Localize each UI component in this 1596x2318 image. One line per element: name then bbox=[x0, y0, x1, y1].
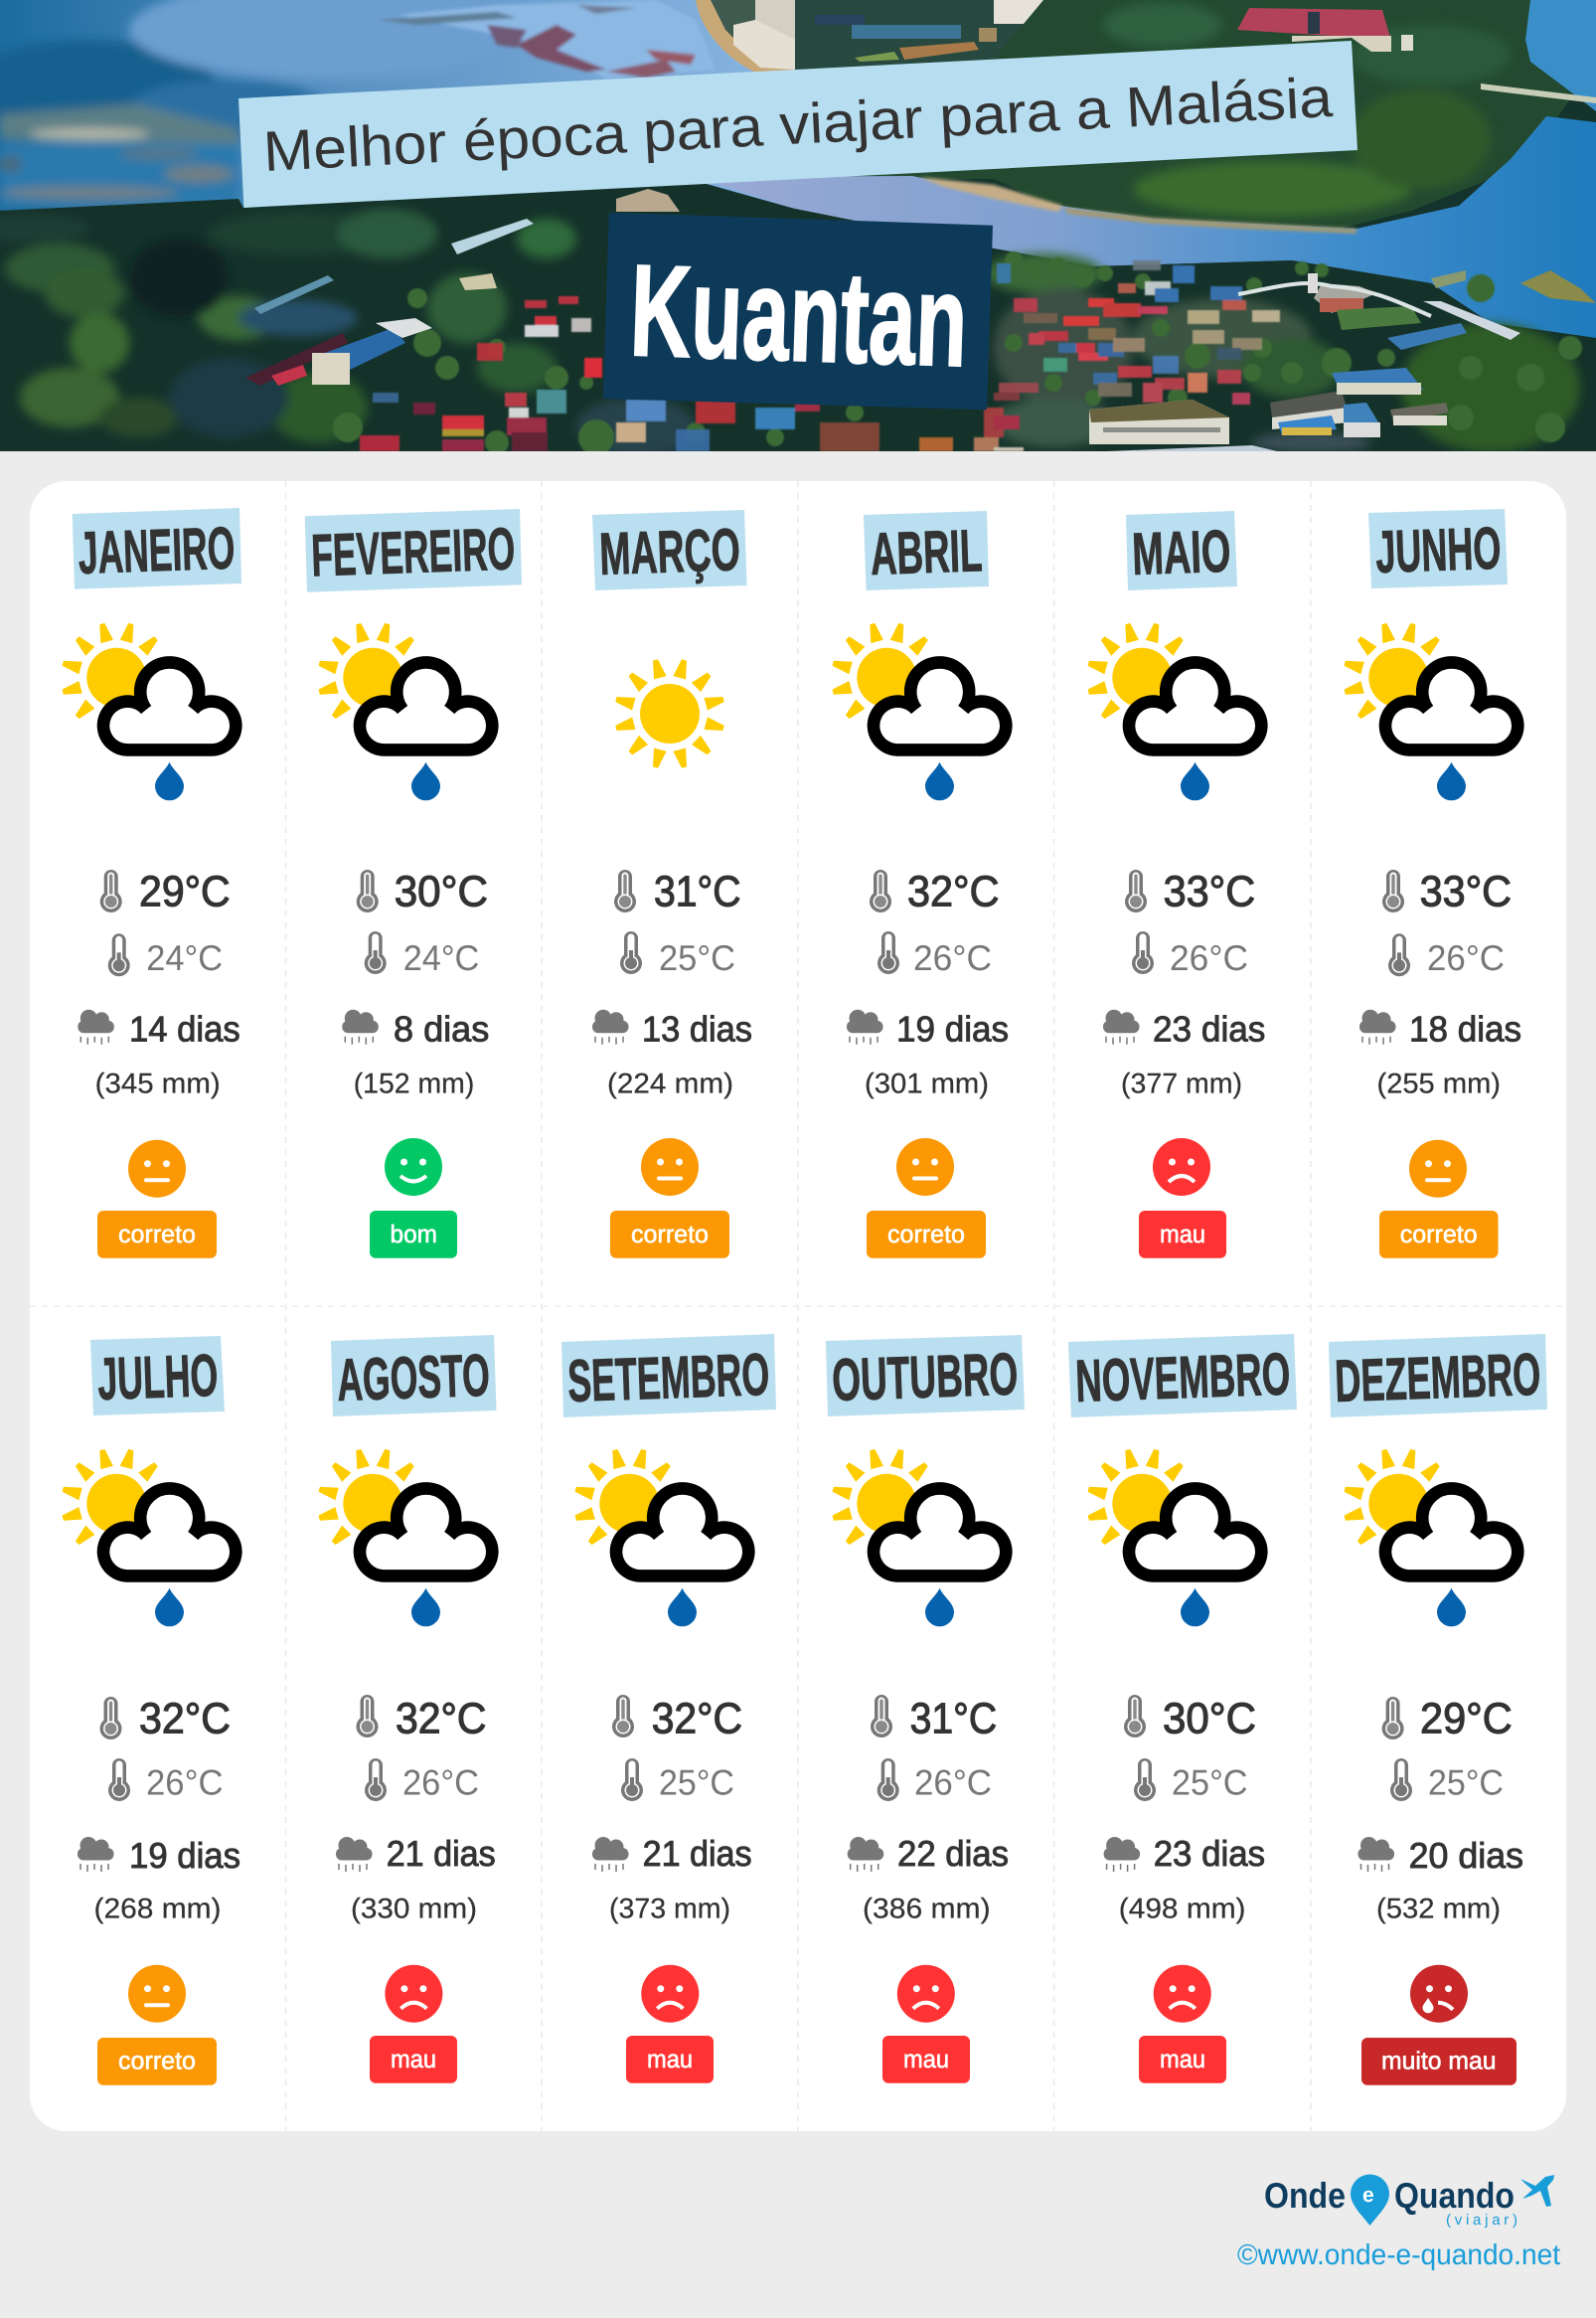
min temperature: 26°C bbox=[914, 1762, 992, 1803]
rain days bbox=[847, 1009, 1009, 1050]
panel: fevereiro bbox=[305, 509, 522, 1258]
max temperature bbox=[614, 869, 741, 916]
rating badge bbox=[370, 2036, 457, 2083]
logo: Onde e Quando viajar: Onde bbox=[1264, 2175, 1346, 2216]
rating badge bbox=[867, 1211, 986, 1258]
month label: MAIO bbox=[1131, 518, 1231, 587]
rain days bbox=[592, 1009, 752, 1050]
header photo: aerial view of Kuantan bbox=[0, 0, 1596, 457]
icon: map pin bbox=[1351, 2175, 1389, 2226]
month label bbox=[561, 1334, 776, 1417]
rating face bbox=[1409, 1140, 1467, 1198]
icon: sun and rain cloud bbox=[62, 622, 236, 800]
rainfall: (377 mm) bbox=[1121, 1068, 1242, 1099]
rain days bbox=[1359, 1009, 1521, 1050]
panel: julho bbox=[62, 1336, 240, 2085]
rain days bbox=[342, 1009, 489, 1050]
icon: sun and rain cloud bbox=[1344, 622, 1517, 800]
min temperature bbox=[620, 931, 735, 978]
month label: SETEMBRO bbox=[566, 1341, 770, 1414]
month label: OUTUBRO bbox=[831, 1341, 1019, 1413]
rating badge bbox=[97, 1211, 217, 1258]
min temperature: 25°C bbox=[659, 937, 735, 978]
max temperature: 32°C bbox=[907, 869, 1000, 916]
rainfall: (268 mm) bbox=[93, 1893, 221, 1924]
rating badge bbox=[1139, 2036, 1226, 2083]
panel: dezembro bbox=[1329, 1334, 1547, 2085]
min temperature bbox=[365, 931, 479, 978]
rainfall: (301 mm) bbox=[865, 1068, 989, 1099]
rainfall: (255 mm) bbox=[1377, 1068, 1501, 1099]
max temperature: 29°C bbox=[139, 869, 231, 916]
rating face bbox=[1153, 1138, 1210, 1196]
min temperature bbox=[1132, 931, 1248, 978]
icon: sun and rain cloud bbox=[1087, 622, 1261, 800]
max temperature bbox=[100, 869, 231, 916]
panel: março bbox=[592, 510, 752, 1258]
min temperature bbox=[1388, 933, 1505, 978]
month label bbox=[1126, 511, 1237, 590]
min temperature bbox=[878, 1758, 992, 1803]
rain days bbox=[592, 1833, 752, 1874]
icon: sun bbox=[614, 658, 725, 769]
month label bbox=[1068, 1334, 1297, 1417]
calendar card bbox=[30, 481, 1566, 2131]
rainfall: (224 mm) bbox=[607, 1068, 733, 1099]
rain days: 22 dias bbox=[897, 1833, 1009, 1874]
month label bbox=[305, 509, 522, 592]
icon: sun and rain cloud bbox=[1344, 1448, 1517, 1626]
icon: airplane bbox=[1520, 2175, 1554, 2207]
month label bbox=[1368, 509, 1508, 588]
icon: sun and rain cloud bbox=[832, 622, 1006, 800]
city name box: Kuantan bbox=[628, 237, 970, 394]
rating badge: muito mau bbox=[1381, 2048, 1497, 2075]
icon: sun and rain cloud bbox=[62, 1448, 236, 1626]
logo: Onde e Quando viajar bbox=[1264, 2175, 1554, 2229]
max temperature: 32°C bbox=[139, 1695, 231, 1742]
rating face bbox=[641, 1965, 699, 2023]
month label: AGOSTO bbox=[336, 1342, 491, 1413]
rating badge: mau bbox=[1160, 1221, 1205, 1248]
max temperature bbox=[1124, 1695, 1256, 1742]
month label: FEVEREIRO bbox=[310, 515, 516, 588]
min temperature: 24°C bbox=[403, 937, 479, 978]
max temperature bbox=[870, 869, 1000, 916]
rain days: 13 dias bbox=[642, 1009, 752, 1050]
min temperature: 25°C bbox=[1428, 1762, 1504, 1803]
rain days: 20 dias bbox=[1409, 1835, 1523, 1876]
rain days bbox=[78, 1009, 240, 1050]
rain days: 23 dias bbox=[1154, 1833, 1265, 1874]
rain days bbox=[848, 1833, 1009, 1874]
title band bbox=[239, 41, 1357, 208]
min temperature: 24°C bbox=[146, 937, 223, 978]
rain days bbox=[1103, 1009, 1265, 1050]
max temperature bbox=[1382, 1695, 1513, 1742]
min temperature: 25°C bbox=[659, 1762, 734, 1803]
rain days bbox=[1104, 1833, 1265, 1874]
min temperature bbox=[108, 1758, 223, 1803]
rating face bbox=[128, 1965, 186, 2023]
max temperature: 32°C bbox=[396, 1695, 487, 1742]
panel: abril bbox=[832, 511, 1009, 1258]
rating badge: correto bbox=[118, 2048, 196, 2075]
rating face bbox=[385, 1965, 442, 2023]
icon: sun and rain cloud bbox=[318, 622, 492, 800]
panel: junho bbox=[1344, 509, 1521, 1258]
min temperature bbox=[1134, 1758, 1248, 1803]
panel: setembro bbox=[561, 1334, 776, 2083]
min temperature bbox=[621, 1758, 734, 1803]
max temperature bbox=[99, 1695, 231, 1742]
rating face bbox=[128, 1140, 186, 1198]
rating face bbox=[897, 1965, 955, 2023]
rating badge bbox=[1139, 1211, 1226, 1258]
rain days: 19 dias bbox=[129, 1835, 240, 1876]
rain days: 18 dias bbox=[1409, 1009, 1521, 1050]
min temperature bbox=[108, 933, 223, 978]
rating face bbox=[1410, 1965, 1468, 2023]
max temperature bbox=[871, 1695, 997, 1742]
logo: Onde e Quando viajar: Quando bbox=[1394, 2175, 1515, 2216]
panel: maio bbox=[1087, 511, 1265, 1258]
city name box bbox=[603, 213, 993, 410]
rating face bbox=[385, 1138, 442, 1196]
min temperature: 26°C bbox=[913, 937, 992, 978]
rainfall: (373 mm) bbox=[609, 1893, 730, 1924]
max temperature bbox=[357, 869, 488, 916]
icon: sun and rain cloud bbox=[832, 1448, 1006, 1626]
rating badge: mau bbox=[647, 2046, 693, 2073]
rating badge bbox=[626, 2036, 714, 2083]
rating badge bbox=[1361, 2038, 1516, 2085]
max temperature: 30°C bbox=[1163, 1695, 1256, 1742]
month label bbox=[73, 508, 241, 589]
month label: MARÇO bbox=[598, 516, 741, 587]
rating badge: bom bbox=[390, 1221, 437, 1248]
min temperature bbox=[365, 1758, 479, 1803]
max temperature bbox=[612, 1695, 742, 1742]
rain days: 23 dias bbox=[1153, 1009, 1265, 1050]
month label: JANEIRO bbox=[78, 515, 236, 586]
rating badge bbox=[370, 1211, 457, 1258]
max temperature: 31°C bbox=[910, 1695, 997, 1742]
max temperature bbox=[1125, 869, 1255, 916]
max temperature: 33°C bbox=[1164, 869, 1255, 916]
rainfall: (386 mm) bbox=[863, 1893, 991, 1924]
min temperature bbox=[878, 931, 992, 978]
min temperature bbox=[1390, 1758, 1504, 1803]
rain days bbox=[1357, 1835, 1523, 1876]
rating badge bbox=[1379, 1211, 1499, 1258]
min temperature: 26°C bbox=[146, 1762, 223, 1803]
rating face bbox=[1154, 1965, 1211, 2023]
month label bbox=[90, 1336, 225, 1415]
rain days bbox=[336, 1833, 496, 1874]
rating badge bbox=[97, 2038, 217, 2085]
rating badge: correto bbox=[631, 1221, 709, 1248]
max temperature: 29°C bbox=[1420, 1695, 1513, 1742]
website credit: ©www.onde-e-quando.net bbox=[1237, 2239, 1560, 2271]
month label: JULHO bbox=[96, 1342, 219, 1412]
rating badge bbox=[882, 2036, 970, 2083]
rainfall: (498 mm) bbox=[1119, 1893, 1246, 1924]
month label bbox=[864, 511, 989, 590]
title band: Melhor época para viajar para a Malásia bbox=[261, 66, 1335, 184]
icon: sun and rain cloud bbox=[318, 1448, 492, 1626]
month label: NOVEMBRO bbox=[1074, 1340, 1291, 1414]
rating face bbox=[896, 1138, 954, 1196]
rating badge: correto bbox=[1400, 1221, 1478, 1248]
min temperature: 26°C bbox=[402, 1762, 479, 1803]
max temperature: 31°C bbox=[654, 869, 741, 916]
rainfall: (532 mm) bbox=[1376, 1893, 1501, 1924]
icon: sun and rain cloud bbox=[1087, 1448, 1261, 1626]
rain days: 19 dias bbox=[896, 1009, 1009, 1050]
rainfall: (345 mm) bbox=[95, 1068, 221, 1099]
month label bbox=[826, 1335, 1025, 1416]
logo: Onde e Quando viajar: (viajar) bbox=[1446, 2212, 1517, 2229]
max temperature: 30°C bbox=[395, 869, 488, 916]
rain days: 21 dias bbox=[643, 1833, 752, 1874]
rainfall: (152 mm) bbox=[354, 1068, 474, 1099]
icon: sun and rain cloud bbox=[574, 1448, 748, 1626]
panel: novembro bbox=[1068, 1334, 1297, 2083]
min temperature: 26°C bbox=[1427, 937, 1505, 978]
rating badge: mau bbox=[903, 2046, 949, 2073]
month label: ABRIL bbox=[870, 517, 983, 587]
min temperature: 25°C bbox=[1172, 1762, 1248, 1803]
rating badge bbox=[610, 1211, 729, 1258]
rain days bbox=[78, 1835, 240, 1876]
panel: janeiro bbox=[62, 508, 241, 1258]
rating badge: correto bbox=[118, 1221, 196, 1248]
max temperature: 32°C bbox=[652, 1695, 742, 1742]
rain days: 14 dias bbox=[129, 1009, 240, 1050]
max temperature bbox=[1382, 869, 1512, 916]
rating badge: mau bbox=[1160, 2046, 1205, 2073]
max temperature: 33°C bbox=[1420, 869, 1512, 916]
month label: JUNHO bbox=[1374, 515, 1502, 585]
month label bbox=[592, 510, 747, 590]
panel: agosto bbox=[318, 1335, 497, 2083]
icon: map pin: e bbox=[1362, 2184, 1374, 2207]
max temperature bbox=[356, 1695, 487, 1742]
rating face bbox=[641, 1138, 699, 1196]
rainfall: (330 mm) bbox=[351, 1893, 477, 1924]
rating badge: mau bbox=[391, 2046, 436, 2073]
rain days: 8 dias bbox=[394, 1009, 489, 1050]
panel: outubro bbox=[826, 1335, 1025, 2083]
min temperature: 26°C bbox=[1170, 937, 1248, 978]
month label bbox=[331, 1335, 497, 1416]
rain days: 21 dias bbox=[387, 1833, 496, 1874]
rating badge: correto bbox=[887, 1221, 965, 1248]
